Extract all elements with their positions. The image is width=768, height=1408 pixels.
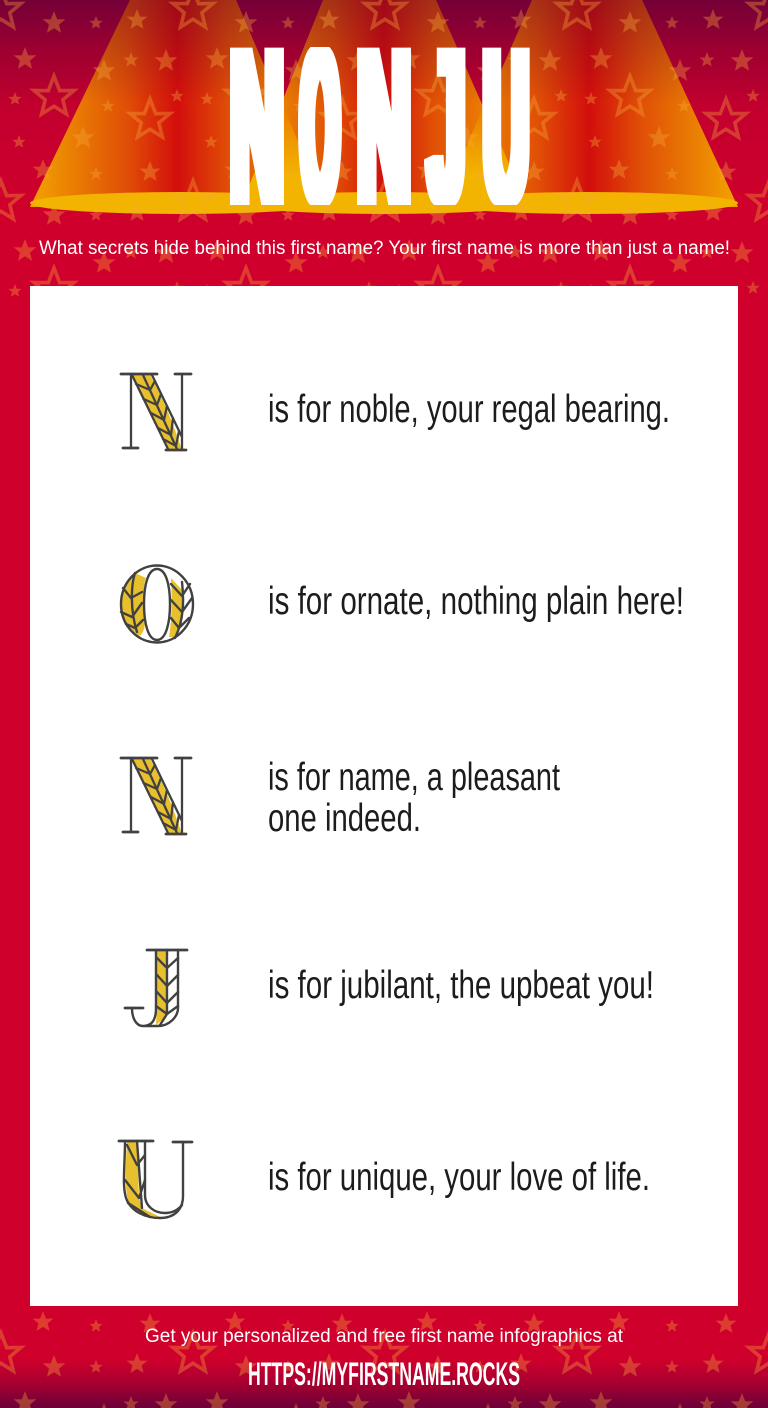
footer text: Get your personalized and free first name infographics at [145, 1326, 624, 1347]
text: name: is for name, a pleasant [268, 756, 560, 799]
title [230, 47, 530, 205]
overlap light: right [441, 105, 527, 206]
footer url: HTTPS://MYFIRSTNAME.ROCKS [248, 1356, 520, 1392]
icon: letter N [121, 758, 191, 834]
icon: letter J [125, 950, 187, 1026]
title: N [230, 2, 284, 251]
text: name [268, 756, 560, 840]
spotlight: right [441, 0, 738, 207]
icon: letter N [121, 374, 191, 450]
title: J [428, 2, 465, 251]
text: jubilant: is for jubilant, the upbeat you! [268, 964, 654, 1007]
title: O [301, 2, 339, 251]
text: U [484, 2, 528, 251]
star pattern: bottom [0, 1300, 768, 1408]
icon: letter U [119, 1141, 192, 1218]
row: N second [121, 756, 560, 840]
spotlight floor pools [30, 192, 738, 214]
spotlights [30, 0, 738, 214]
overlap light: left [240, 105, 325, 207]
icon: letter O [121, 566, 193, 642]
panel: letters [30, 286, 738, 1306]
text: name: one indeed. [268, 797, 421, 840]
row: O [121, 566, 684, 642]
spotlight: left [30, 0, 325, 207]
star pattern: top [0, 0, 768, 300]
row: J [125, 950, 654, 1026]
row: N [121, 374, 670, 450]
title: N [357, 2, 411, 251]
row: U [119, 1141, 650, 1218]
subtitle: What secrets hide behind this first name? Your first name is more than just a name! [39, 238, 730, 259]
spotlight: middle [240, 0, 527, 206]
text: unique: is for unique, your love of life. [268, 1156, 650, 1199]
